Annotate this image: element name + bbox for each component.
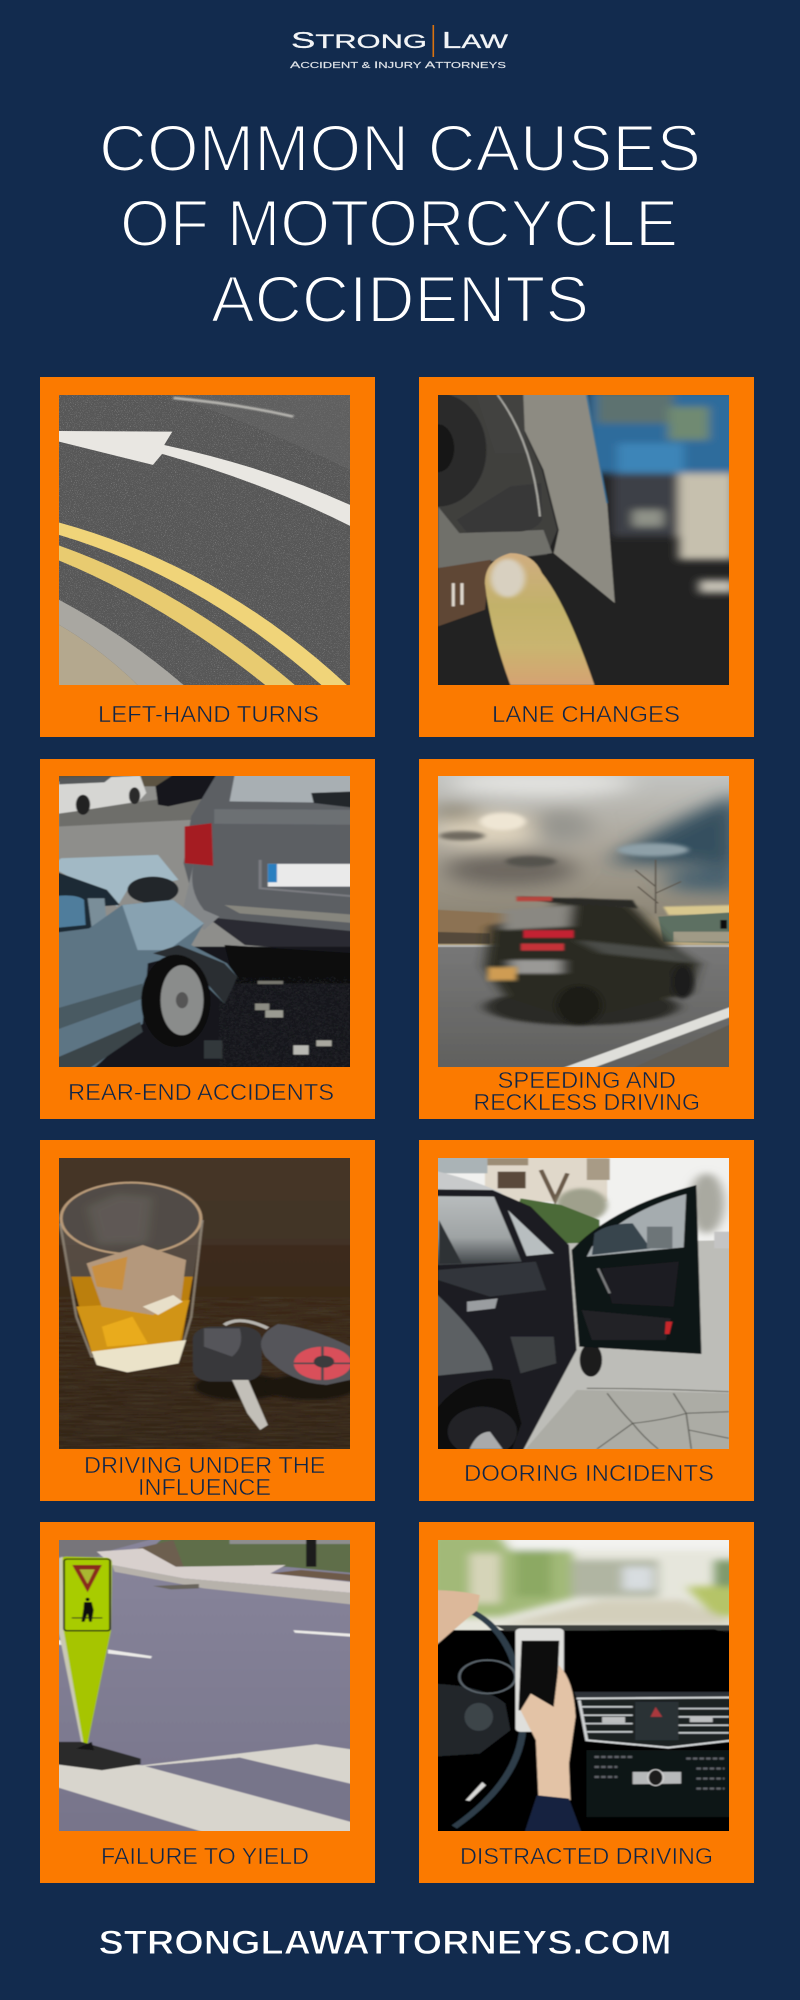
panel: rear-end accidents: [40, 759, 375, 1119]
label line 2: RECKLESS DRIVING: [474, 1089, 700, 1115]
panel: lane changes: [390, 377, 754, 737]
title: [99, 111, 701, 336]
photo: driver holding smartphone: [438, 1540, 729, 1831]
photo: road markings: [59, 395, 350, 685]
photo: speeding car: [438, 776, 729, 1067]
panel: left-hand turns: [40, 377, 375, 737]
title line 1: COMMON CAUSES: [99, 111, 701, 185]
label: LANE CHANGES: [492, 701, 680, 727]
panel: failure to yield: [40, 1522, 375, 1883]
panel background: [40, 1522, 375, 1883]
label line 1: DRIVING UNDER THE: [84, 1452, 325, 1478]
label: FAILURE TO YIELD: [101, 1843, 309, 1869]
panel background: [40, 759, 375, 1119]
logo tagline: A CCIDENT & INJURY A TTORNEYS: [290, 60, 506, 71]
panel background: [419, 1522, 754, 1883]
panel: speeding and reckless driving: [419, 759, 754, 1119]
label: LEFT-HAND TURNS: [98, 701, 319, 727]
photo: car with open door: [438, 1158, 729, 1449]
photo: finger on steering wheel button: [438, 395, 729, 685]
logo: Strong Law: [290, 25, 509, 71]
panel background: [419, 759, 754, 1119]
panel background: [40, 377, 375, 737]
label: DOORING INCIDENTS: [464, 1460, 714, 1486]
panel: dooring incidents: [419, 1140, 754, 1501]
panel background: [419, 1140, 754, 1501]
photo: rear-end collision: [59, 776, 350, 1067]
title line 3: ACCIDENTS: [211, 262, 589, 336]
logo divider: [432, 25, 434, 57]
label line 2: INFLUENCE: [138, 1474, 271, 1500]
panel: driving under the influence: [40, 1140, 375, 1501]
footer website: STRONGLAWATTORNEYS.COM: [98, 1924, 672, 1962]
label: REAR-END ACCIDENTS: [68, 1079, 334, 1105]
logo wordmark: Law: L AW: [442, 27, 509, 53]
panel background: [40, 1140, 375, 1501]
title line 2: OF MOTORCYCLE: [120, 186, 678, 260]
panel: distracted driving: [419, 1522, 754, 1883]
photo: whisky glass and car keys: [59, 1158, 350, 1449]
photo: pedestrian yield sign at crosswalk: [59, 1540, 350, 1831]
label line 1: SPEEDING AND: [498, 1067, 676, 1093]
label: DISTRACTED DRIVING: [460, 1843, 713, 1869]
logo wordmark: Strong: S TRONG: [291, 27, 427, 53]
panel background: [419, 377, 754, 737]
